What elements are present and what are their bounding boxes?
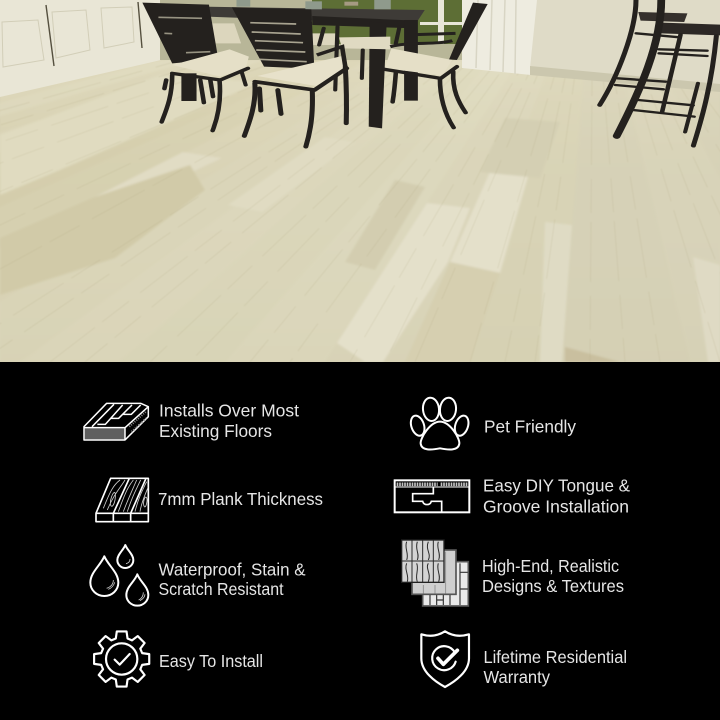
text: Designs & Textures xyxy=(482,576,624,596)
text: Scratch Resistant xyxy=(158,579,284,599)
feature: lifetime residential warranty xyxy=(421,631,627,687)
text: 7mm Plank Thickness xyxy=(158,489,323,509)
feature: high-end realistic designs and textures xyxy=(402,540,624,606)
left wall panels xyxy=(0,0,165,97)
icon: layered floor xyxy=(84,403,148,440)
text xyxy=(484,647,627,687)
chair 3 xyxy=(385,3,488,128)
text: Waterproof, Stain & xyxy=(158,560,306,580)
feature: 7mm plank thickness xyxy=(96,478,323,522)
bar stools xyxy=(600,0,720,146)
text: Existing Floors xyxy=(159,421,272,441)
icon: plank with grain xyxy=(96,478,148,522)
lighter and darker plank segments xyxy=(337,203,470,362)
text: Pet Friendly xyxy=(484,416,576,436)
chair 1 xyxy=(142,3,249,131)
text: Easy DIY Tongue & xyxy=(483,476,630,496)
icon: gear with check xyxy=(94,631,149,687)
text: Groove Installation xyxy=(483,496,629,516)
black features panel xyxy=(0,362,720,720)
feature: waterproof, stain and scratch resistant xyxy=(90,545,306,606)
text xyxy=(158,560,306,599)
chair 2 xyxy=(232,7,347,147)
feature: pet friendly xyxy=(408,397,576,450)
icon: stacked texture swatches xyxy=(402,540,468,606)
dining set xyxy=(142,0,720,147)
text: High-End, Realistic xyxy=(482,556,619,576)
icon: water drops xyxy=(90,545,148,606)
feature: installs over most existing floors xyxy=(84,400,299,441)
text: Installs Over Most xyxy=(159,400,299,420)
table xyxy=(181,7,425,128)
photo: room with wood-look floor and dining furniture xyxy=(0,0,720,362)
window and curtain xyxy=(160,0,538,75)
icon: shield with check xyxy=(421,631,469,687)
text xyxy=(159,400,299,441)
text: Easy To Install xyxy=(159,651,263,671)
far chairs xyxy=(212,23,400,90)
text xyxy=(483,476,630,516)
feature: easy to install xyxy=(94,631,263,687)
tableware xyxy=(236,0,391,9)
floor planks xyxy=(0,60,720,362)
feature: easy DIY tongue and groove installation xyxy=(395,476,630,516)
wood grain lines xyxy=(382,206,500,310)
text xyxy=(482,556,624,596)
icon: tongue and groove joint xyxy=(395,480,469,512)
text: Warranty xyxy=(484,667,550,687)
icon: paw print xyxy=(408,397,471,450)
right wall xyxy=(530,0,720,92)
text: Lifetime Residential xyxy=(484,647,627,667)
